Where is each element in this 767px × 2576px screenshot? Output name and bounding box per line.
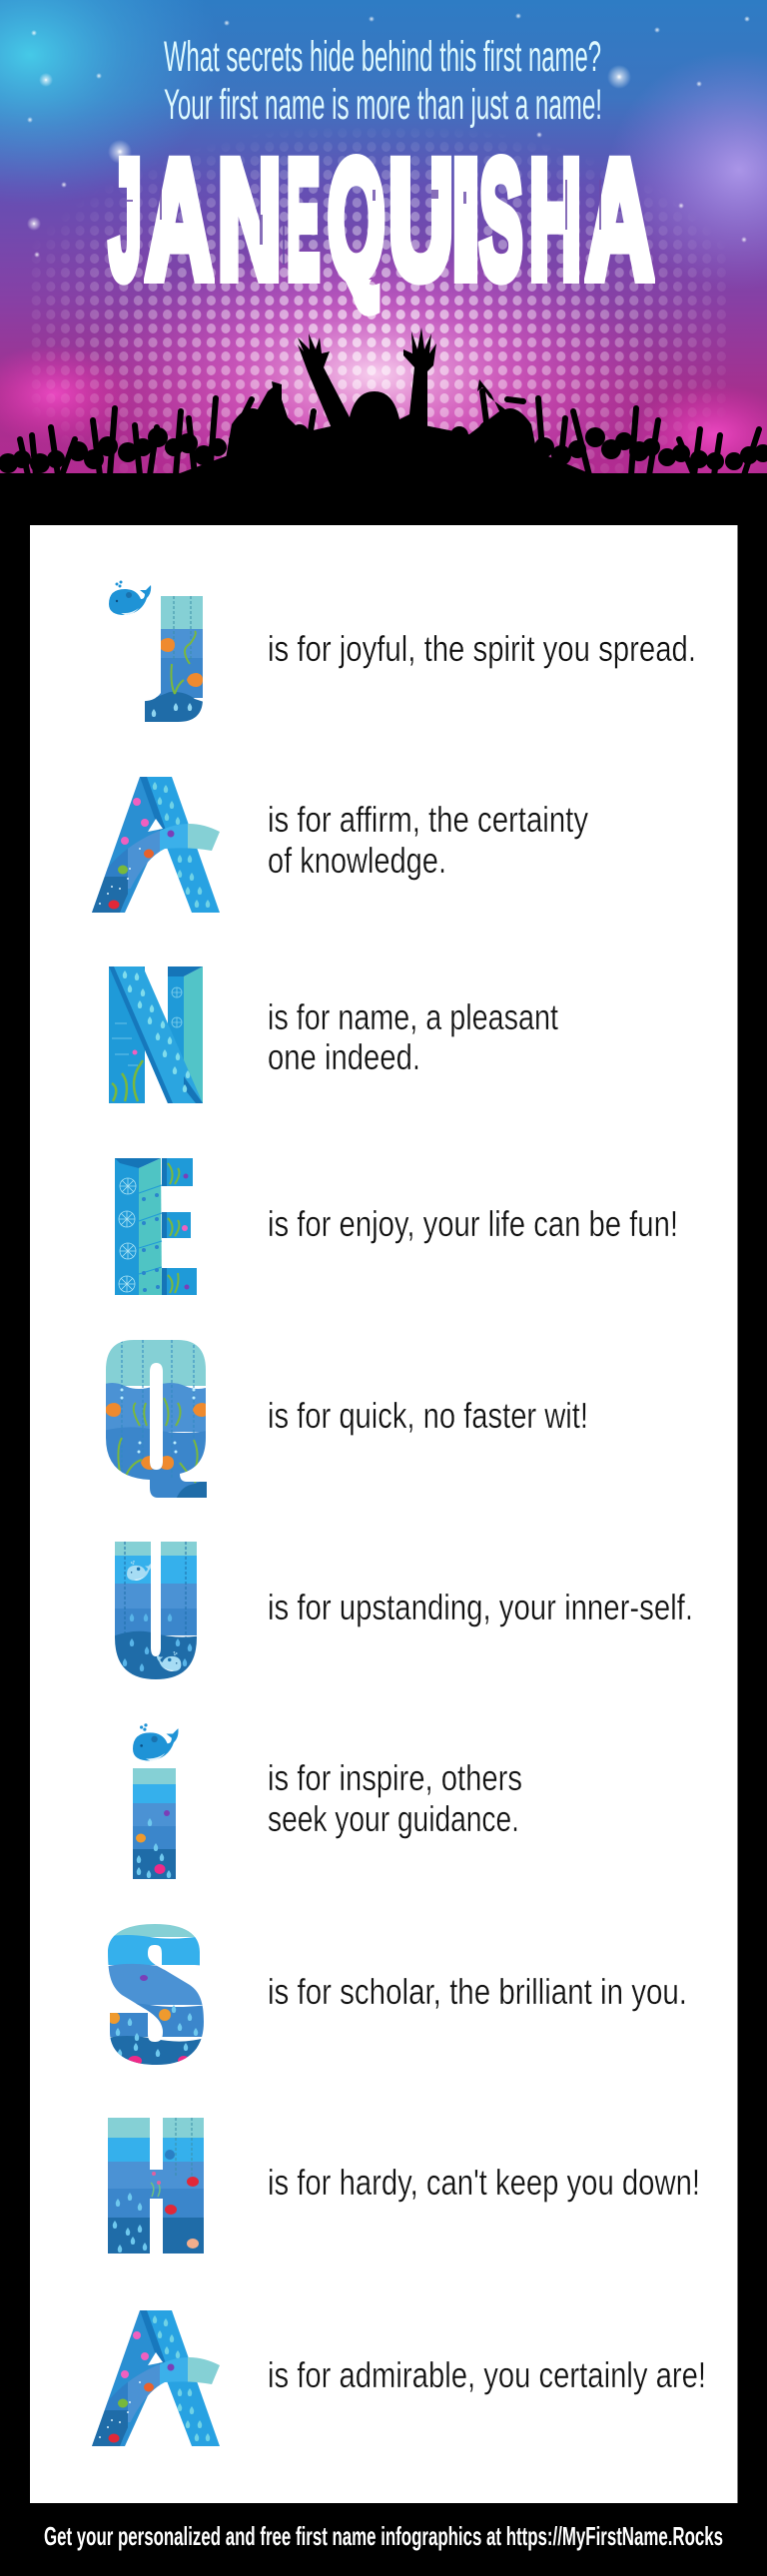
letter A: [88, 777, 222, 917]
letter H: [108, 2118, 204, 2254]
row: A: [88, 777, 588, 917]
letter I: [133, 1768, 176, 1879]
row: S: [104, 1921, 687, 2069]
row: Q: [100, 1336, 588, 1503]
row: U: [110, 1538, 693, 1687]
text: N: one indeed.: [268, 1036, 420, 1077]
text: I: is for inspire, others: [268, 1757, 522, 1798]
crowd silhouette: [0, 327, 767, 529]
text: I: seek your guidance.: [268, 1798, 519, 1839]
row: H: [104, 2115, 700, 2257]
row: I: [133, 1723, 522, 1879]
title: JANEQUISHA: Q: [328, 127, 385, 314]
title: JANEQUISHA: E: [287, 127, 320, 314]
title: JANEQUISHA: J: [109, 127, 142, 314]
title: JANEQUISHA: I: [451, 127, 480, 314]
letter U: [115, 1542, 197, 1679]
icon: whale over I: [133, 1723, 179, 1760]
text: N: [268, 996, 558, 1077]
row: N: [109, 966, 558, 1103]
title: JANEQUISHA: A: [146, 127, 213, 314]
text: A: is for affirm, the certainty: [268, 799, 588, 840]
text: A: of knowledge.: [268, 840, 446, 881]
white content panel: [30, 525, 737, 2503]
letter E: [115, 1158, 197, 1295]
text: S: is for scholar, the brilliant in you.: [268, 1971, 687, 2012]
title: JANEQUISHA: S: [479, 127, 522, 314]
letter J: [145, 596, 203, 722]
text: E: is for enjoy, your life can be fun!: [268, 1203, 678, 1244]
row: E: [115, 1158, 678, 1295]
row: J: [109, 581, 696, 729]
text: N: is for name, a pleasant: [268, 996, 558, 1037]
stage background: [0, 0, 767, 514]
letter A second: [88, 2310, 222, 2450]
text: I: [268, 1757, 522, 1839]
title: JANEQUISHA: N: [218, 127, 282, 314]
letter Q: [106, 1340, 207, 1498]
subtitle: [164, 33, 602, 129]
letter N: [109, 966, 203, 1103]
title: JANEQUISHA: U: [388, 127, 453, 314]
text: Q: is for quick, no faster wit!: [268, 1395, 588, 1436]
icon: whale over J: [109, 581, 151, 615]
hero banner: [0, 0, 767, 473]
row: final A: [88, 2310, 706, 2450]
letter S: [108, 1924, 204, 2065]
title: JANEQUISHA: H: [529, 127, 581, 314]
title: JANEQUISHA: [107, 127, 655, 317]
title: JANEQUISHA: A: [586, 127, 653, 314]
text: A: [268, 799, 588, 881]
